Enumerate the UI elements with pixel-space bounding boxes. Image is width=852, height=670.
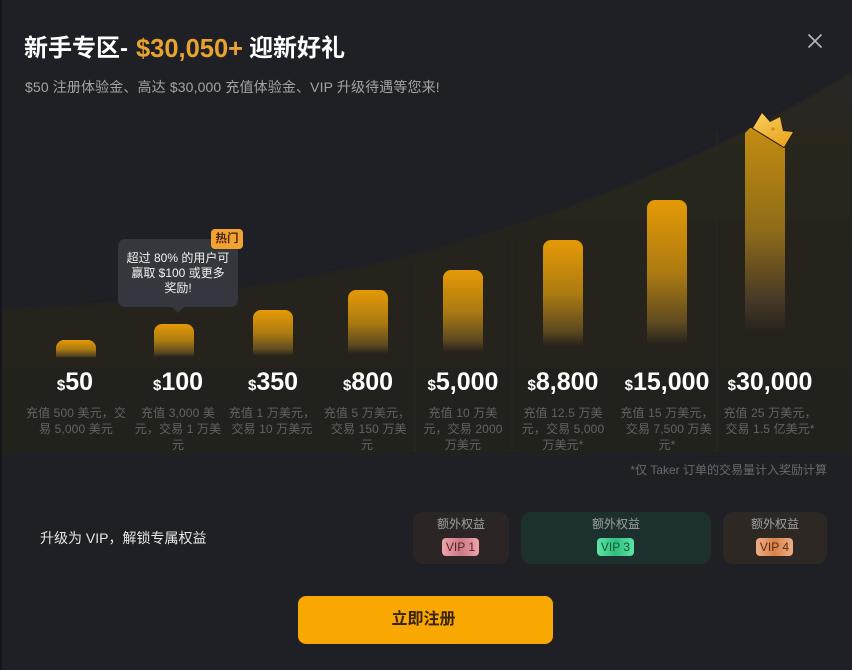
description: $100: 充值 3,000 美: [141, 406, 215, 420]
bar: $350: [253, 310, 293, 356]
title: 迎新好礼: [249, 35, 345, 62]
amount: $350: $350: [248, 368, 298, 396]
amount: $50: $50: [57, 368, 93, 396]
badge: VIP 1: VIP 1: [446, 540, 475, 554]
description: $50: 易 5,000 美元: [39, 422, 113, 436]
description: $800: 交易 150 万美: [331, 422, 407, 436]
register button: [298, 596, 553, 644]
description: $800: [324, 406, 410, 452]
badge: VIP 1: [442, 538, 479, 556]
description: $800: 充值 5 万美元，: [324, 406, 410, 420]
bar: $50: [56, 340, 96, 358]
amount: $5,000: $5,000: [428, 368, 498, 396]
badge: VIP 3: VIP 3: [601, 540, 630, 554]
VIP heading: 升级为 VIP，解锁专属权益: [40, 530, 206, 546]
amount: $800: $800: [343, 368, 393, 396]
badge: VIP 4: [756, 538, 793, 556]
subtitle: $50 注册体验金、高达 $30,000 充值体验金、VIP 升级待遇等您来!: [25, 79, 440, 95]
description: $30,000: [723, 406, 817, 436]
badge: VIP 3: [597, 538, 634, 556]
tooltip: 赢取 $100 或更多: [131, 266, 225, 280]
panel: VIP 1 perk: [413, 512, 509, 564]
title: $30,050+: [136, 35, 243, 63]
bar: $15,000: [647, 200, 687, 344]
badge: hot: [211, 229, 243, 249]
icon: close: [808, 34, 822, 48]
description: $350: 交易 10 万美元: [231, 422, 313, 436]
panel: VIP 3 perk: 额外权益: [592, 517, 640, 531]
badge: hot: 热门: [216, 233, 238, 245]
description: $5,000: 元，交易 2000: [423, 422, 503, 436]
description: $5,000: 充值 10 万美: [428, 406, 497, 420]
footnote: *仅 Taker 订单的交易量计入奖励计算: [630, 463, 827, 477]
bar: $30,000: [745, 128, 785, 332]
panel: VIP 1 perk: 额外权益: [437, 517, 485, 531]
description: $15,000: 充值 15 万美元，: [620, 406, 714, 420]
panel: VIP 4 perk: [723, 512, 827, 564]
description: $350: 充值 1 万美元，: [229, 406, 315, 420]
bar: $800: [348, 290, 388, 354]
amount: $100: $100: [153, 368, 203, 396]
badge: VIP 4: VIP 4: [760, 540, 789, 554]
description: $50: 充值 500 美元，交: [26, 406, 126, 420]
title: 新手专区-: [24, 35, 128, 62]
bar: $100: [154, 324, 194, 357]
description: $5,000: [423, 406, 503, 452]
description: $5,000: 万美元: [445, 438, 481, 452]
amount: $15,000: $15,000: [625, 368, 709, 396]
amount: $30,000: $30,000: [728, 368, 812, 396]
amount: $8,800: $8,800: [528, 368, 598, 396]
description: $8,800: 万美元*: [542, 438, 584, 452]
register button: 立即注册: [391, 611, 456, 628]
description: $8,800: [522, 406, 604, 452]
bar: $8,800: [543, 240, 583, 346]
description: $15,000: [620, 406, 714, 452]
description: $15,000: 交易 7,500 万美: [626, 422, 712, 436]
panel: VIP 3 perk: [521, 512, 711, 564]
description: $800: 元: [361, 438, 373, 452]
description: $30,000: 交易 1.5 亿美元*: [725, 422, 815, 436]
description: $50: [26, 406, 126, 436]
description: $350: [229, 406, 315, 436]
tooltip: 超过 80% 的用户可: [127, 251, 229, 265]
title: [24, 35, 345, 63]
description: $100: 元: [172, 438, 184, 452]
description: $8,800: 充值 12.5 万美: [523, 406, 603, 420]
icon: crown: [752, 112, 794, 148]
panel: VIP 4 perk: 额外权益: [751, 517, 799, 531]
description: $100: 元，交易 1 万美: [135, 422, 221, 436]
description: $100: [135, 406, 221, 452]
description: $30,000: 充值 25 万美元，: [723, 406, 817, 420]
bar: $5,000: [443, 270, 483, 352]
tooltip: [118, 239, 238, 313]
tooltip: 奖励!: [164, 281, 192, 295]
description: $8,800: 元，交易 5,000: [522, 422, 604, 436]
description: $15,000: 元*: [659, 438, 675, 452]
